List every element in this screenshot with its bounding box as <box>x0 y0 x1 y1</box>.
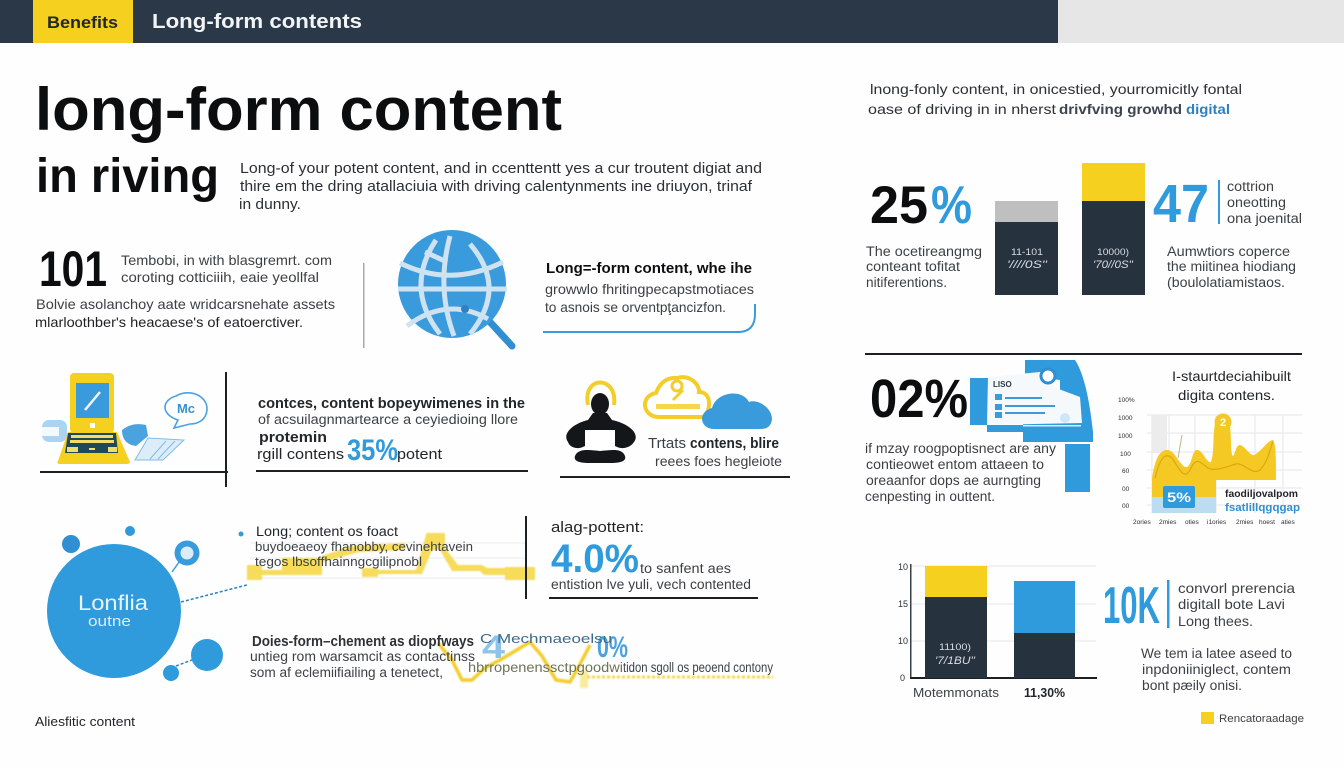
stat: 25%: 25 <box>870 176 928 235</box>
area chart: yellow peaks: 60 <box>1122 468 1130 475</box>
intro text: in dunny. <box>239 197 301 213</box>
callout: long-form content: Long=-form content, whe ihe <box>546 261 752 277</box>
area chart: yellow peaks: faodiljovalpom <box>1225 488 1298 500</box>
text block: trats contens: reees foes hegleiote <box>655 453 782 469</box>
stat: 47: Aumwtiors coperce <box>1167 244 1290 259</box>
stat: 02%: oreaanfor dops ae aurngting <box>866 473 1041 488</box>
stat: 47: 47 <box>1153 174 1209 234</box>
stat: 10k: We tem ia latee aseed to <box>1141 646 1292 661</box>
icon: globe with magnifier <box>398 230 512 346</box>
circle: lonfia outne with nodes: Lonflia <box>78 592 148 615</box>
stat: 02% <box>865 369 1056 504</box>
header bar <box>0 0 1344 43</box>
chart with text: long content: buydoeaeoy fhanobby, cevinehtavein <box>255 539 473 554</box>
area chart: yellow peaks: hoest <box>1259 519 1275 526</box>
area chart: yellow peaks: 00 <box>1122 503 1130 510</box>
stat: 25%: nitiferentions. <box>866 275 947 290</box>
area chart: yellow peaks: 2mies <box>1159 519 1177 526</box>
divider: laptop panel <box>40 372 228 487</box>
stat: 47 <box>1153 174 1302 290</box>
bar chart: bottom: 11100) <box>939 642 971 652</box>
area chart: yellow peaks: 2mies <box>1236 519 1254 526</box>
stat: 47: oneotting <box>1227 195 1286 210</box>
intro text right: drivfving growhd <box>1059 101 1182 117</box>
stat: 101: mlarloothber's heacaese's of eatoerctiver. <box>35 314 303 330</box>
legend: Rencatoraadage <box>1219 713 1304 725</box>
stat: 10k: digitall bote Lavi <box>1178 596 1285 612</box>
stat: 10k <box>1103 577 1295 693</box>
area chart: yellow peaks: 100% <box>1118 397 1135 404</box>
bar chart: top: '////0S'' <box>1007 259 1048 271</box>
chart with text: does-form-chement <box>250 629 773 688</box>
stat: 02%: 02% <box>870 369 968 429</box>
bar chart: bottom <box>898 562 1097 700</box>
chart with text: long content: Long; content os foact <box>256 524 398 539</box>
intro text right: digital <box>1186 101 1230 117</box>
intro text right: oase of driving in in nherst <box>868 101 1056 117</box>
stat: 02%: contieowet entom attaeen to <box>866 457 1044 472</box>
chart with text: does-form-chement: 4 <box>482 629 505 665</box>
chart with text: does-form-chement: som af eclemiifiailing a tenetect, <box>250 665 443 680</box>
stat: 101: 101 <box>39 241 107 297</box>
chart with text: does-form-chement: Doies-form–chement as diopfways <box>252 634 474 650</box>
chart with text: does-form-chement: 0% <box>597 631 628 664</box>
stat: 4.0%: 4.0% <box>551 537 639 581</box>
area chart: yellow peaks: 1000 <box>1118 433 1133 440</box>
area chart: yellow peaks: i1ories <box>1207 519 1227 526</box>
icon: laptop and tablet <box>42 373 207 464</box>
chart title: digital contents <box>1172 368 1291 403</box>
callout: long-form content <box>543 261 755 332</box>
bar chart: bottom: 10 <box>898 562 908 572</box>
stat: 25%: conteant tofitat <box>866 259 960 274</box>
area chart: yellow peaks: 00 <box>1122 486 1130 493</box>
stat: 101: Bolvie asolanchoy aate wridcarsnehate assets <box>36 296 335 312</box>
intro text: thire em the dring atallaciuia with driving calentynments ine driuyon, trinaf <box>240 179 753 195</box>
bar chart: bottom: Motemmonats <box>913 685 1000 700</box>
callout: long-form content: growwlo fhritingpecapstmotiaces <box>545 281 754 297</box>
icon: person reading with clouds <box>566 377 772 463</box>
stat: 02%: if mzay roogpoptisnect are any <box>865 441 1056 456</box>
icon: laptop and tablet: Mc <box>177 401 195 416</box>
area chart: yellow peaks: oties <box>1185 519 1199 526</box>
stat: 10k: convorl prerencia <box>1178 580 1295 596</box>
bar chart: top: 10000) <box>1097 247 1129 257</box>
bar chart: bottom: 10 <box>898 636 908 646</box>
stat: 10k: bont pæily onisi. <box>1142 678 1242 693</box>
text block: 35% potent: contces, content bopeywimenes in the <box>258 396 525 412</box>
stat: 101: Tembobi, in with blasgremrt. com <box>121 252 332 268</box>
text block: 35% potent: potent <box>397 447 442 463</box>
area chart: yellow peaks: 1000 <box>1118 415 1133 422</box>
stat: 4.0%: entistion lve yuli, vech contented <box>551 577 751 592</box>
stat: 25%: The ocetireangmg <box>866 244 982 259</box>
text block: trats contens: Trtats <box>648 436 686 452</box>
area chart: yellow peaks: 2ories <box>1133 519 1151 526</box>
chart with text: does-form-chement: C Mechmaeoelsu <box>480 631 612 646</box>
stat: 10k: inpdoniiniglect, contem <box>1142 662 1291 677</box>
icon: document card in blue folder: LISO <box>993 380 1012 389</box>
chart with text: long content <box>247 516 535 599</box>
stat: 47: cottrion <box>1227 179 1274 194</box>
callout: long-form content: to asnois se orventpţancizfon. <box>545 299 726 315</box>
intro text: Long-of your potent content, and in ccenttentt yes a cur troutent digiat and <box>240 161 762 177</box>
header bar: Benefits <box>47 13 118 32</box>
stat: 25%: % <box>931 176 972 235</box>
text block: trats contens: contens, blire <box>690 436 779 452</box>
stat: 47: ona joenital <box>1227 211 1302 226</box>
bar chart: bottom: 11,30% <box>1024 685 1065 700</box>
circle: lonfia outne with nodes: outne <box>88 613 131 630</box>
intro text right <box>868 81 1242 117</box>
chart title: digital contents: digita contens. <box>1178 387 1275 403</box>
area chart: yellow peaks: 100 <box>1120 451 1131 458</box>
header bar: Long-form contents <box>152 11 362 33</box>
area chart: yellow peaks: aties <box>1281 519 1295 526</box>
icon: document card in blue folder <box>970 360 1093 492</box>
stat: 02%: cenpesting in outtent. <box>865 489 995 504</box>
intro text right: lnong-fonly content, in onicestied, yourromicitly fontal <box>870 81 1242 97</box>
text block: 35% potent: rgill contens <box>257 447 344 463</box>
stat: 4.0%: to sanfent aes <box>640 561 731 576</box>
stat: 47: the miitinea hiodiang <box>1167 259 1296 274</box>
stat: 25% <box>866 176 982 290</box>
chart with text: long content: tegos lbsoffhainngcgilipnobl <box>255 554 422 569</box>
bar chart: bottom: 15 <box>898 599 908 609</box>
text block: trats contens <box>560 436 790 478</box>
stat: 10k: 10K <box>1103 577 1160 635</box>
title: in riving <box>36 150 219 203</box>
bar chart: bottom: '7/1BU'' <box>935 655 976 667</box>
bar chart: top <box>995 163 1145 295</box>
text block: 35% potent: 35% <box>347 434 398 467</box>
stat: 47: (boulolatiamistaos. <box>1167 275 1285 290</box>
title <box>35 76 562 203</box>
text block: 35% potent: protemin <box>259 430 327 446</box>
stat: 10k: Long thees. <box>1178 613 1253 629</box>
stat: 101 <box>35 241 335 330</box>
text block: 35% potent <box>256 396 528 472</box>
chart with text: does-form-chement: hbrropenenssctpgoodwi <box>468 660 623 675</box>
circle: lonfia outne with nodes <box>47 526 247 681</box>
area chart: yellow peaks: 2 <box>1220 417 1226 429</box>
stat: 4.0%: alag-pottent: <box>551 519 644 536</box>
area chart: yellow peaks <box>1118 397 1302 526</box>
intro text <box>239 161 762 213</box>
title: long-form content <box>35 76 562 143</box>
chart with text: does-form-chement: untieg rom warsamcit as contactinss <box>250 649 475 664</box>
stat: 4.0% <box>549 519 758 599</box>
text block: 35% potent: of acsuilagnmartearce a ceyiedioing llore <box>258 412 518 427</box>
area chart: yellow peaks: fsatlillqgqgap <box>1225 502 1300 514</box>
chart title: digital contents: I-staurtdeciahibuilt <box>1172 368 1291 384</box>
bar chart: bottom: 0 <box>900 673 905 683</box>
area chart: yellow peaks: 5% <box>1167 489 1192 505</box>
bar chart: top: '70//0S'' <box>1093 259 1134 271</box>
stat: 101: coroting cotticiiih, eaie yeollfal <box>121 269 319 285</box>
bar chart: top: 11-101 <box>1011 247 1043 257</box>
chart with text: does-form-chement: tidon sgoll os peoend contony <box>623 660 773 675</box>
footer source: Aliesfitic content <box>35 715 136 729</box>
